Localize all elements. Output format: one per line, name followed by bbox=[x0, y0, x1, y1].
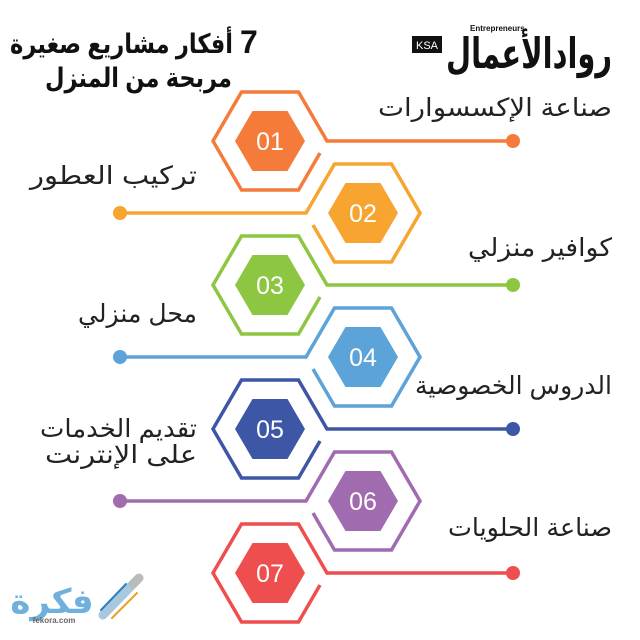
labels bbox=[28, 94, 612, 542]
hexagon 07 bbox=[213, 524, 520, 622]
hexagon 04: 04 bbox=[349, 344, 377, 372]
hexagon 04 bbox=[113, 308, 420, 406]
hexagon 03 bbox=[213, 236, 520, 334]
labels: صناعة الحلويات bbox=[448, 514, 612, 542]
hexagon 06: 06 bbox=[349, 488, 377, 516]
labels: كوافير منزلي bbox=[468, 234, 612, 262]
hexagon 01 bbox=[213, 92, 520, 190]
logo: rowad al aamal: Entrepreneurs bbox=[470, 24, 525, 33]
labels: تقديم الخدمات bbox=[40, 415, 197, 444]
hexagon 05: 05 bbox=[256, 416, 284, 444]
labels: محل منزلي bbox=[78, 300, 197, 328]
logo: rowad al aamal: KSA bbox=[416, 40, 439, 52]
hexagon 02: 02 bbox=[349, 200, 377, 228]
labels: الدروس الخصوصية bbox=[415, 372, 612, 401]
logo: fekra bbox=[10, 578, 139, 625]
title: 7 bbox=[240, 24, 258, 60]
title: مربحة من المنزل bbox=[45, 63, 232, 94]
hexagon 02 bbox=[113, 164, 420, 262]
title bbox=[10, 24, 258, 94]
labels: تركيب العطور bbox=[28, 162, 197, 190]
logo: fekra: فكرة bbox=[10, 583, 94, 622]
hexagon 06 bbox=[113, 452, 420, 550]
logo: rowad al aamal bbox=[412, 24, 612, 79]
labels: على الإنترنت bbox=[45, 441, 197, 469]
title: أفكار مشاريع صغيرة bbox=[10, 26, 233, 60]
hexagon 05 bbox=[213, 380, 520, 478]
hexagon 01: 01 bbox=[256, 128, 284, 156]
hexagon 03: 03 bbox=[256, 272, 284, 300]
logo: fekra: fekora.com bbox=[33, 616, 75, 625]
labels: صناعة الإكسسوارات bbox=[378, 94, 612, 122]
hexagon 07: 07 bbox=[256, 560, 284, 588]
